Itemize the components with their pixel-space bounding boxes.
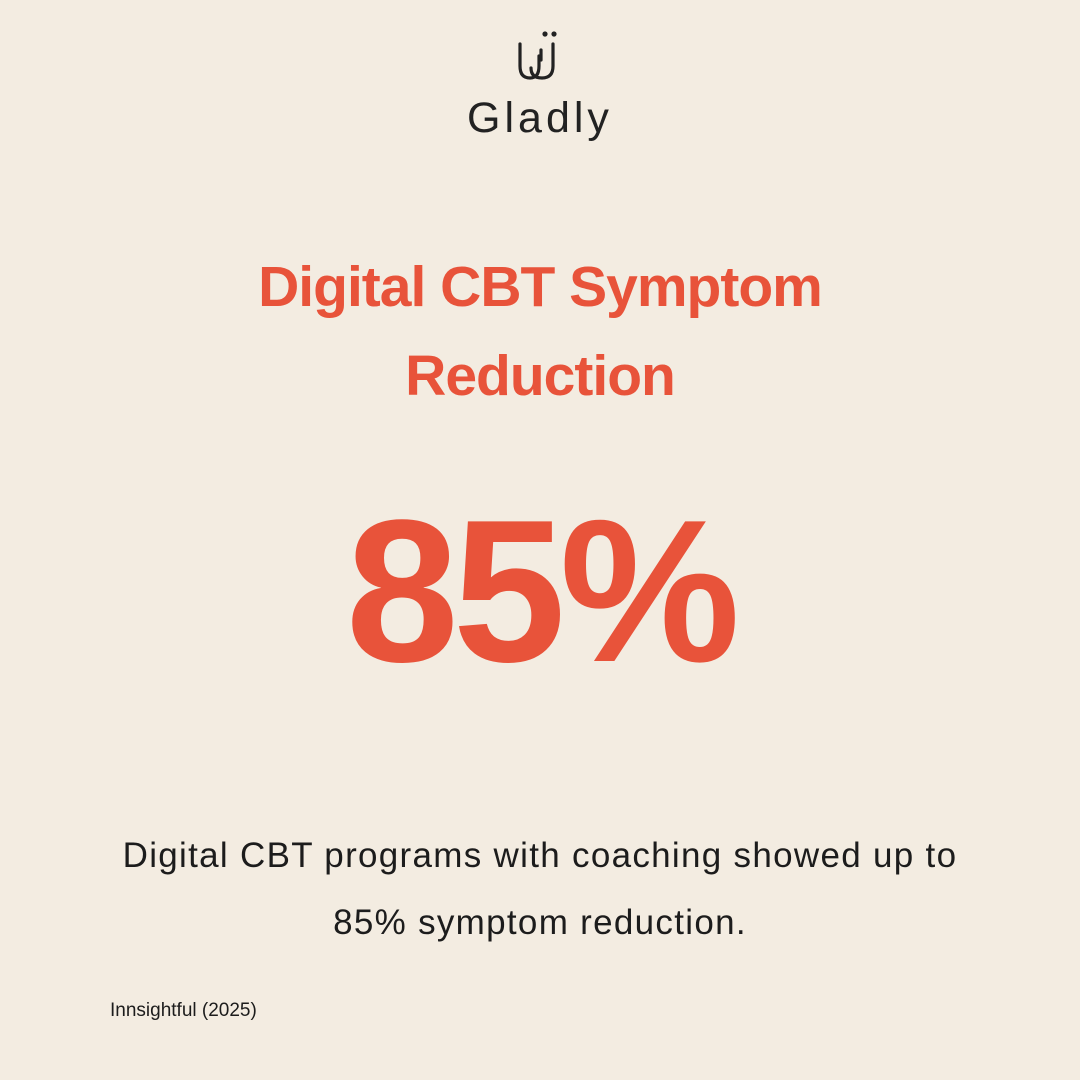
logo [467,31,613,142]
title: Digital CBT Symptom [258,255,822,319]
description: 85% symptom reduction. [333,903,747,942]
big stat: 85% [346,478,734,705]
description: Digital CBT programs with coaching showed up to [123,836,957,875]
wordmark: Gladly [467,94,613,142]
title: Reduction [405,344,675,408]
source: Innsightful (2025) [110,1000,257,1021]
title [258,255,822,408]
description [123,836,957,942]
icon: logo mark [518,31,557,80]
